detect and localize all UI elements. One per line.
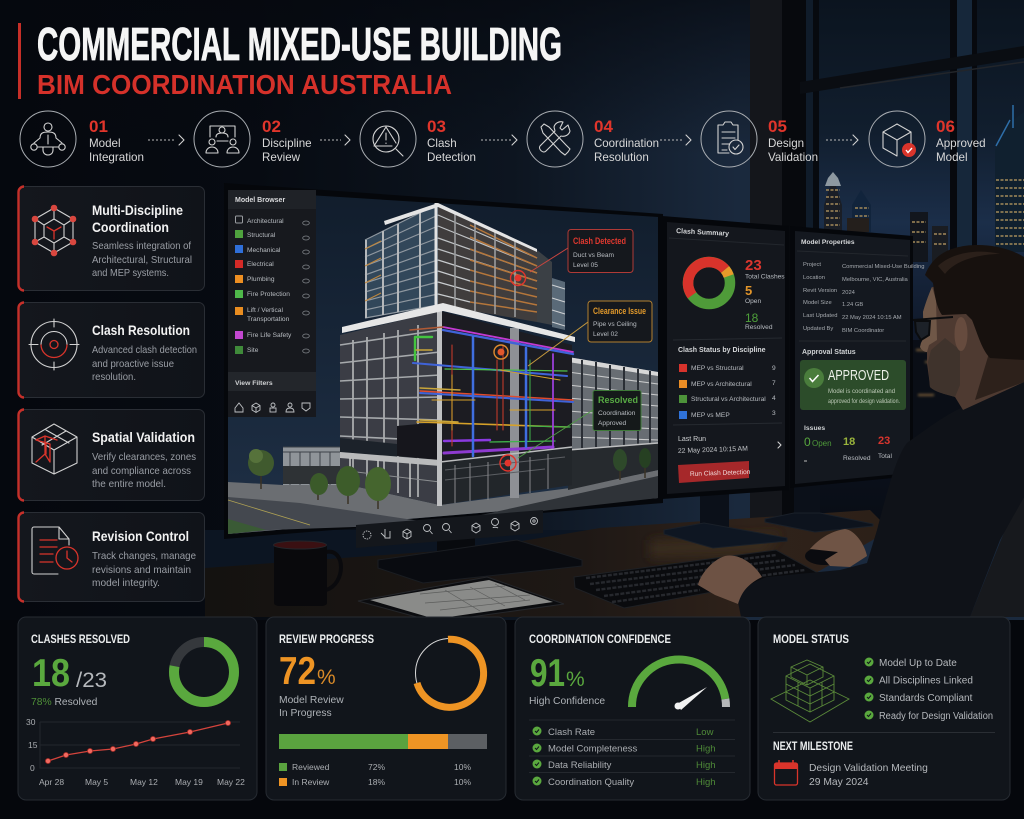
monitor 2: clash summary: 9 (772, 365, 776, 372)
card: clash resolution: and proactive issue (92, 359, 174, 370)
monitor 3: model properties: Last Updated (803, 313, 837, 319)
panel: review progress: 10% (454, 777, 471, 787)
monitor 2: clash summary: 7 (772, 380, 776, 387)
panel: clashes resolved (18, 617, 257, 800)
panel: review progress: REVIEW PROGRESS (279, 634, 374, 646)
callout: resolved (593, 390, 641, 430)
step 06 (869, 111, 986, 167)
resolved trend line chart: Apr 28 (39, 777, 64, 787)
podium left facade (340, 330, 440, 441)
model browser panel: Transportation (247, 316, 290, 323)
model browser panel: Site (247, 347, 259, 354)
card: spatial validation (18, 410, 204, 500)
model browser panel: View Filters (235, 380, 273, 387)
callout: resolved: Coordination (598, 410, 636, 417)
ground floor lines (445, 457, 565, 480)
view icons (235, 403, 310, 412)
tower (365, 204, 438, 318)
confidence rows: High (696, 777, 716, 788)
panel: review progress: 72% (368, 762, 385, 772)
panel: review progress: 18% (368, 777, 385, 787)
monitor 3: model properties: 0 (804, 435, 811, 449)
panel: clashes resolved: 18 (32, 652, 70, 695)
subtitle: BIM COORDINATION AUSTRALIA (37, 69, 452, 100)
card: multi-discipline coordination (18, 186, 204, 290)
monitor 3: model properties: 1.24 GB (842, 302, 863, 308)
model browser panel: Mechanical (247, 247, 281, 254)
approved banner: Model is coordinated and (828, 389, 895, 395)
monitor 3: model properties: 23 (878, 435, 890, 447)
arrow (320, 135, 350, 145)
slab (342, 303, 575, 342)
card: clash resolution: Advanced clash detection (92, 345, 197, 356)
panel: coordination confidence: High Confidence (529, 696, 605, 707)
monitor 3: model properties: Model Properties (801, 239, 855, 246)
step 05: Validation (768, 151, 818, 164)
monitor 3: model properties: 18 (843, 436, 855, 448)
confidence rows: Data Reliability (548, 760, 612, 771)
MEP systems overlay (410, 327, 573, 456)
confidence rows: Coordination Quality (548, 777, 634, 788)
monitor 3: model properties: Issues (804, 425, 825, 432)
torso and arm (737, 380, 1024, 617)
model browser panel: Fire Protection (247, 291, 290, 298)
monitor 3: model properties: Commercial Mixed-Use Building (842, 264, 924, 270)
model browser panel: Structural (247, 232, 276, 239)
step 04: Coordination (594, 137, 659, 150)
title block (18, 18, 562, 100)
panel: model status: Design Validation Meeting (809, 763, 928, 774)
resolved trend line chart: May 5 (85, 777, 108, 787)
panel: review progress: In Review (292, 777, 330, 787)
monitor 1: BIM model view (224, 183, 663, 548)
step 03: Clash (427, 137, 457, 150)
panel: coordination confidence: COORDINATION CONFIDENCE (529, 634, 671, 646)
skyline through window (824, 105, 1024, 440)
card: spatial validation: and compliance across (92, 466, 191, 477)
neck and face (920, 285, 1024, 410)
card: clash resolution (18, 302, 204, 398)
callout: clearance issue: Pipe vs Ceiling (593, 321, 637, 328)
panel: review progress: % (317, 666, 336, 689)
callout: clearance issue: Level 02 (593, 331, 618, 338)
monitor 2: clash summary: Total Clashes (745, 274, 785, 280)
step 02: Discipline (262, 137, 312, 150)
monitor 3: model properties: Approval Status (802, 349, 856, 356)
main title: COMMERCIAL MIXED-USE BUILDING (37, 18, 562, 70)
card: multi-discipline coordination: Coordination (92, 219, 169, 235)
step 04 (527, 111, 659, 167)
monitor 2: clash summary: Resolved (745, 324, 773, 331)
approved banner (800, 360, 906, 410)
panel: review progress (266, 617, 506, 800)
monitor 3: model properties: Total (878, 453, 892, 460)
card: multi-discipline coordination: Seamless integration of (92, 241, 191, 252)
step 04: 04 (594, 117, 613, 136)
monitor 2: clash summary: 22 May 2024 10:15 AM (678, 446, 748, 455)
card: clash resolution: Clash Resolution (92, 322, 190, 338)
monitor 2: clash summary: Clash Status by Discipline (678, 347, 766, 354)
monitor 3: model properties: Project (803, 262, 821, 268)
trees (248, 448, 651, 509)
status checklist: Ready for Design Validation (879, 711, 993, 722)
model browser panel: Fire Life Safety (247, 332, 292, 339)
monitor 3: model properties: 22 May 2024 10:15 AM (842, 315, 902, 321)
card: clash resolution: resolution. (92, 372, 136, 383)
approved banner: approved for design validation. (828, 399, 900, 405)
coffee mug (274, 541, 341, 606)
resolved trend line chart: May 19 (175, 777, 203, 787)
panel: review progress: Reviewed (292, 762, 330, 772)
review ring (416, 638, 484, 708)
monitor 2: clash summary: 4 (772, 395, 776, 402)
status checklist: All Disciplines Linked (879, 676, 973, 686)
glasses (913, 317, 953, 340)
card: spatial validation: Verify clearances, zones (92, 452, 196, 463)
panel: coordination confidence: % (566, 668, 585, 691)
panel: review progress: In Progress (279, 708, 332, 719)
model browser panel: Architectural (247, 218, 284, 225)
monitor 3: model properties: 2024 (842, 290, 856, 296)
step 05: 05 (768, 117, 787, 136)
arrow (481, 135, 517, 145)
resolved trend line chart (26, 717, 245, 787)
callout: resolved: Resolved (598, 395, 638, 405)
desk (205, 510, 890, 617)
model browser panel (228, 190, 316, 417)
confidence rows: High (696, 760, 716, 771)
card: spatial validation: Spatial Validation (92, 429, 195, 445)
callout: clash detected (568, 230, 633, 272)
monitor 3: model properties: Model Size (803, 300, 832, 306)
arrow (148, 135, 184, 145)
callout: clearance issue: Clearance Issue (593, 306, 646, 316)
step 05: Design (768, 137, 804, 150)
step 03: 03 (427, 117, 446, 136)
card: multi-discipline coordination: and MEP systems. (92, 268, 169, 279)
panel: review progress: 72 (279, 650, 316, 693)
right wing (568, 357, 658, 450)
confidence gauge (632, 659, 726, 710)
callout: clearance issue (588, 301, 652, 342)
hands (698, 556, 762, 604)
step 03: Detection (427, 151, 476, 164)
resolved trend line chart: 15 (28, 740, 38, 750)
run button: Run Clash Detection (690, 469, 751, 478)
status checklist: Model Up to Date (879, 658, 957, 669)
step 01 (20, 111, 144, 167)
resolved trend line chart: 0 (30, 763, 35, 773)
resolved donut (174, 642, 234, 702)
tower side wing (537, 250, 552, 325)
bottom metric panels (18, 617, 1010, 800)
approved banner: APPROVED (828, 368, 889, 384)
callout leaders and markers (494, 248, 593, 471)
low wing left (283, 447, 343, 485)
monitor 2: clash summary: Clash Summary (676, 228, 729, 238)
monitor stands (378, 482, 873, 583)
monitor 2: clash summary: 3 (772, 410, 776, 417)
monitor 3: model properties: Location (803, 275, 825, 281)
confidence rows: Clash Rate (548, 727, 595, 738)
icon: wireframe building (771, 660, 849, 722)
monitor 3: model properties: Open (812, 439, 832, 448)
confidence rows (532, 726, 716, 788)
resolved trend line chart: May 22 (217, 777, 245, 787)
confidence rows: Low (696, 727, 714, 738)
step 02: Review (262, 151, 301, 164)
model browser panel: Model Browser (235, 197, 285, 204)
tablet with drawing (358, 577, 564, 622)
ground (228, 470, 658, 534)
resolved trend line chart: 30 (26, 717, 36, 727)
review stacked bar (279, 734, 487, 749)
podium faces (340, 311, 440, 505)
chair (970, 497, 1024, 617)
panel: model status: NEXT MILESTONE (773, 741, 853, 753)
monitor 2: clash summary: Open (745, 298, 761, 305)
step 01: Integration (89, 151, 144, 164)
process steps (20, 111, 986, 167)
card: revision control: revisions and maintain (92, 565, 191, 576)
feature cards (18, 186, 204, 602)
model browser panel: Plumbing (247, 276, 275, 283)
panel: clashes resolved: 78% Resolved (31, 697, 98, 708)
monitor 2: clash summary: MEP vs MEP (691, 412, 730, 419)
model browser panel: Electrical (247, 261, 274, 268)
callout: clash detected: Duct vs Beam (573, 252, 615, 259)
title accent bar (18, 23, 21, 99)
step 05 (701, 111, 818, 167)
step 06: 06 (936, 117, 955, 136)
monitor 3: model properties: Resolved (843, 455, 871, 462)
monitor 2: clash summary: 18 (745, 311, 759, 325)
person at workstation (698, 245, 1024, 617)
confidence rows: Model Completeness (548, 744, 637, 754)
panel: review progress: Model Review (279, 695, 344, 706)
monitor 2: clash summary: Last Run (678, 436, 706, 443)
monitor 3: model properties: Updated By (803, 326, 833, 332)
monitor 3: model properties: Revit Version (803, 288, 837, 294)
confidence rows: High (696, 744, 716, 754)
monitor 3: model properties (790, 226, 924, 488)
monitor 2: clash summary: MEP vs Architectural (691, 381, 752, 388)
monitor 2: clash summary: 5 (745, 283, 752, 298)
panel: coordination confidence: 91 (530, 652, 565, 695)
panel: review progress: 10% (454, 762, 471, 772)
callout: resolved: Approved (598, 420, 627, 427)
step 04: Resolution (594, 151, 649, 164)
card: multi-discipline coordination: Architectural, Structural (92, 255, 192, 266)
building model (283, 203, 658, 506)
arrow (660, 135, 691, 145)
card: spatial validation: the entire model. (92, 479, 166, 490)
step 02 (194, 111, 312, 167)
monitor 3: model properties: Melbourne, VIC, Australia (842, 277, 909, 283)
viewer toolbar (356, 510, 543, 548)
step 02: 02 (262, 117, 281, 136)
monitor 2: clash summary: 23 (745, 257, 762, 274)
monitor 2: clash summary (662, 216, 789, 499)
icon: calendar (774, 760, 798, 785)
card: revision control: Track changes, manage (92, 551, 196, 562)
monitor 2: clash summary: Structural vs Architectural (691, 396, 766, 403)
step 06: Model (936, 151, 968, 164)
step 01: Model (89, 137, 121, 150)
callout: clash detected: Level 05 (573, 262, 598, 269)
resolved trend line chart: May 12 (130, 777, 158, 787)
card: revision control (18, 512, 204, 602)
panel: model status: MODEL STATUS (773, 634, 849, 646)
status checklist (864, 658, 993, 722)
model browser panel: Lift / Vertical (247, 307, 283, 314)
card: revision control: Revision Control (92, 528, 189, 544)
step 03 (360, 111, 476, 167)
status checklist: Standards Compliant (879, 693, 973, 704)
card: multi-discipline coordination: Multi-Discipline (92, 202, 183, 218)
hair (925, 245, 1024, 360)
panel: coordination confidence (515, 617, 750, 800)
monitor 2: clash summary: MEP vs Structural (691, 365, 744, 372)
step 06: Approved (936, 137, 986, 150)
monitor 3: model properties: BIM Coordinator (842, 328, 884, 334)
callout: clash detected: Clash Detected (573, 236, 626, 246)
panel: clashes resolved: /23 (76, 669, 107, 692)
visibility icons (303, 221, 309, 353)
run button (678, 461, 751, 483)
arrow (826, 135, 858, 145)
clash donut chart (688, 262, 730, 304)
panel: model status: 29 May 2024 (809, 777, 869, 788)
panel: clashes resolved: CLASHES RESOLVED (31, 634, 130, 646)
panel: model status (758, 617, 1010, 800)
keyboard and mouse (574, 547, 843, 608)
step 01: 01 (89, 117, 108, 136)
card: revision control: model integrity. (92, 578, 160, 589)
